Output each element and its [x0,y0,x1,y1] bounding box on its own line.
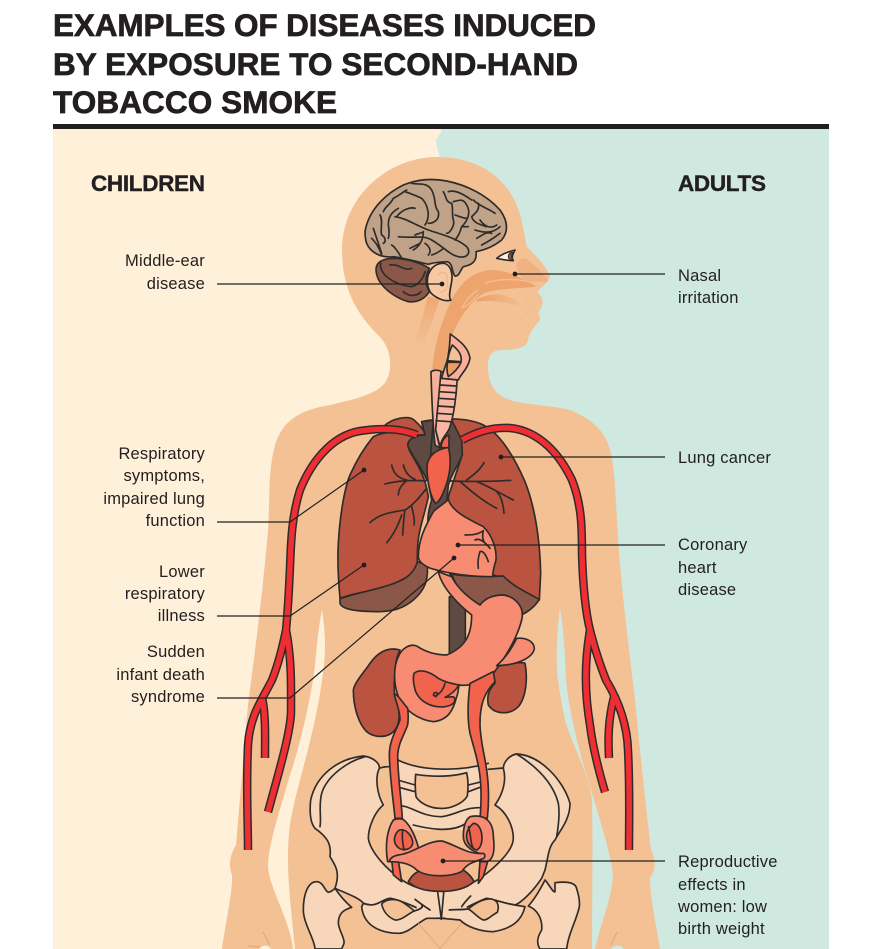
heading: children: CHILDREN [91,171,205,196]
epiglottis [442,334,470,380]
label: nasal irritation: irritation [678,289,739,307]
right ovary [463,816,494,862]
heading: adults: ADULTS [678,171,766,196]
ear [427,263,452,301]
oesophagus [449,597,465,660]
left ureter [389,693,408,818]
label: sudden infant death syndrome: infant death [116,666,205,684]
panel: children background [53,129,443,949]
duodenum inner [413,671,459,707]
brain folds [372,183,500,258]
label: respiratory symptoms: function [146,512,205,530]
right kidney [488,663,526,713]
title: TOBACCO SMOKE [53,84,337,120]
bronchi dark [408,420,433,480]
arm gap left [268,610,325,949]
bronchial branches [370,463,513,543]
sacrum tip [437,889,444,919]
title: BY EXPOSURE TO SECOND-HAND [53,46,578,82]
left artery [247,429,417,850]
label: lung cancer: Lung cancer [678,449,771,467]
label: reproductive effects: effects in [678,876,746,894]
label: lower respiratory illness: respiratory [125,585,206,603]
left ovary [386,819,419,862]
pelvic area [303,754,579,949]
pancreas [497,638,534,666]
right ureter [468,672,495,818]
label: sudden infant death syndrome: Sudden [147,643,205,661]
ureters [389,672,495,818]
label: middle-ear disease: disease [147,275,205,293]
pubic bone [362,898,525,933]
label: lower respiratory illness: illness [158,607,205,625]
aorta upper [441,435,449,448]
body silhouette [222,157,660,949]
aorta [427,447,450,503]
heart [418,499,496,577]
hand creases [248,932,617,947]
trachea tube [431,370,442,448]
sacrum band [397,759,488,830]
stomach and duodenum [395,572,522,722]
left lung back lobe [383,418,427,443]
left kidney [353,649,400,736]
head organs [376,250,548,380]
trachea and aorta [427,334,470,503]
cerebellum [376,258,429,302]
leader lines [217,274,665,861]
rectum [408,870,474,891]
right lung base [452,574,539,616]
left ilium [310,756,442,918]
label: reproductive effects: Reproductive [678,853,778,871]
right artery [462,428,629,850]
leader dots [362,272,517,863]
hand gaps [259,946,271,949]
title: EXAMPLES OF DISEASES INDUCED [53,7,596,43]
eye [497,250,515,261]
label: sudden infant death syndrome: syndrome [131,688,205,706]
label: reproductive effects: women: low [677,898,767,916]
kidneys [353,649,526,736]
left lung [338,432,428,598]
coronary vessels [465,531,490,568]
lower ureters [392,860,488,883]
label: respiratory symptoms: Respiratory [118,445,206,463]
label: coronary heart disease: Coronary [678,536,748,554]
left lung base [340,562,427,612]
reproductive organs [386,816,494,876]
nasal passage [432,270,537,380]
label: middle-ear disease: Middle-ear [125,252,205,270]
uterus [389,841,485,876]
label: nasal irritation: Nasal [678,267,721,285]
right lung [422,419,541,600]
lumbar block [415,773,468,808]
right ilium [442,754,570,918]
label: respiratory symptoms: impaired lung [103,490,205,508]
label: reproductive effects: birth weight [678,920,765,938]
right femur [528,880,579,949]
chest and abdomen organs [338,418,541,736]
label: coronary heart disease: heart [678,559,717,577]
arm gap right [557,608,613,949]
label: coronary heart disease: disease [678,581,736,599]
obturator left [382,900,414,920]
label: lower respiratory illness: Lower [159,563,205,581]
panel: adults background [436,129,829,949]
title [53,7,596,120]
left femur [303,882,352,949]
brain [365,180,506,276]
obturator right [468,899,498,920]
trachea rings [436,372,457,447]
label: respiratory symptoms: symptoms, [123,467,205,485]
